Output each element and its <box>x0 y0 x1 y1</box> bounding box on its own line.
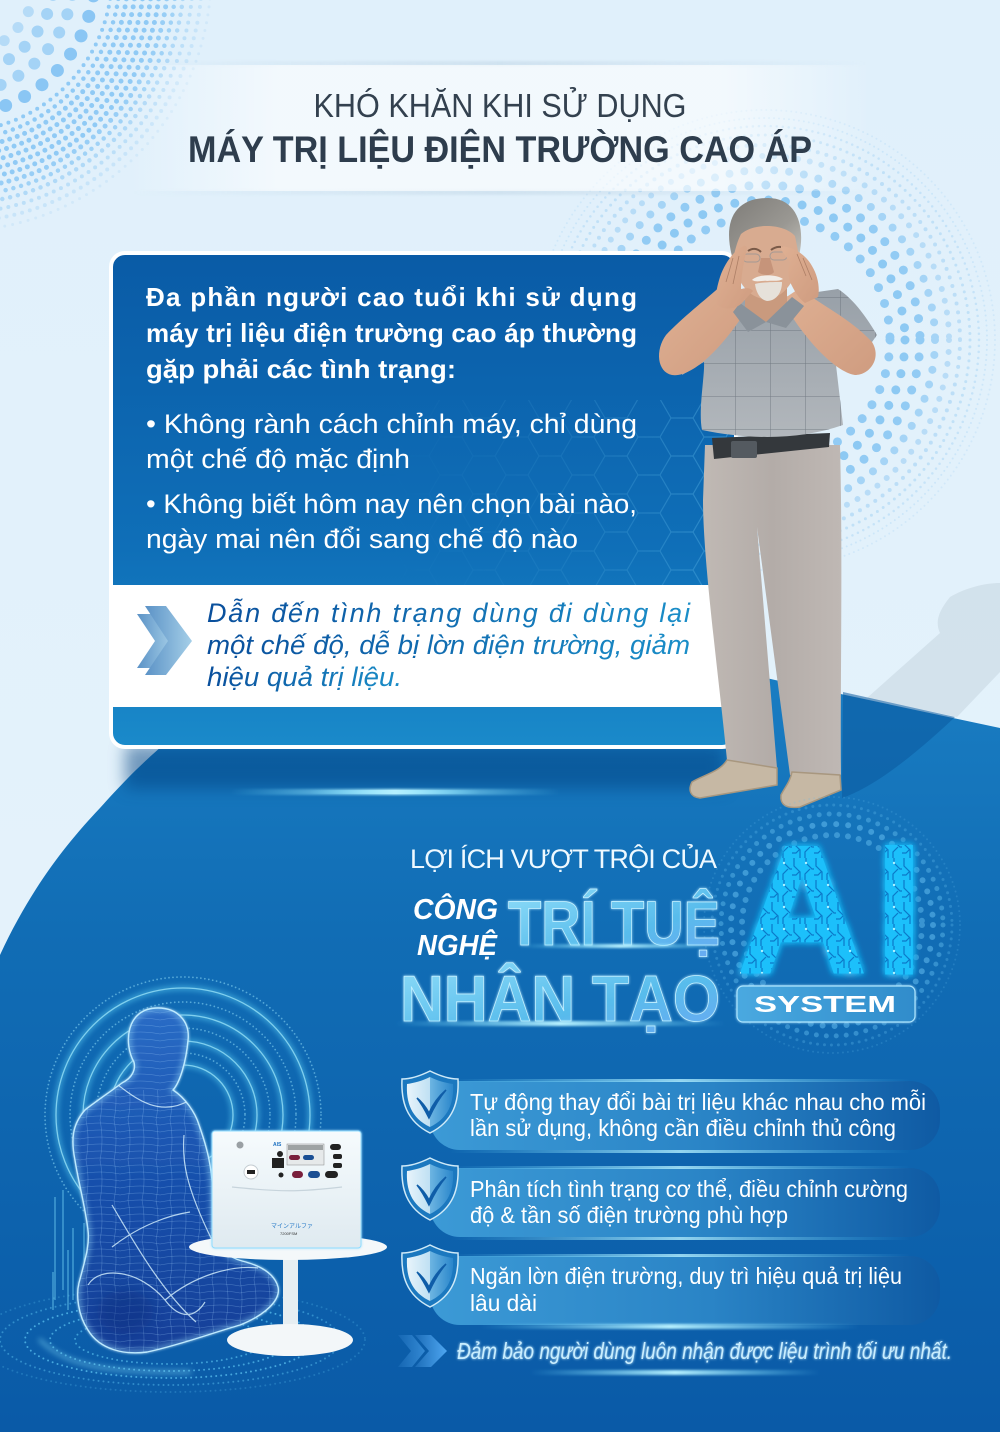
decorative dot arcs: top left <box>0 0 211 231</box>
table with white base <box>189 1234 387 1356</box>
benefit 2: Phân tích tình trạng cơ thể, điều chỉnh cường <box>470 1176 908 1202</box>
concentric energy rings <box>45 977 321 1253</box>
icon: shield check <box>402 1071 458 1133</box>
card intro text <box>146 282 637 384</box>
chevrons icon <box>137 606 192 675</box>
benefit 3 <box>402 1245 940 1325</box>
panel: difficulties card <box>111 253 736 747</box>
heading: benefits: LỢI ÍCH VƯỢT TRỘI CỦA <box>410 842 717 874</box>
vertical light lines <box>53 1190 84 1310</box>
glow line under card <box>230 789 560 795</box>
glow lines below big heading <box>395 944 725 1026</box>
heading: artificial intelligence <box>400 888 720 1035</box>
heading: technology: NGHỆ <box>417 928 499 962</box>
card bullet list: ngày mai nên đổi sang chế độ nào <box>146 524 578 554</box>
consequence text <box>207 598 691 692</box>
card intro text: Đa phần người cao tuổi khi sử dụng <box>146 282 637 312</box>
card bullet list: một chế độ mặc định <box>146 444 410 474</box>
dotted floor <box>0 1288 365 1392</box>
card intro text: máy trị liệu điện trường cao áp thường <box>146 318 637 348</box>
heading: artificial intelligence: TRÍ TUỆ <box>508 888 720 959</box>
benefit 3: Ngăn lờn điện trường, duy trì hiệu quả trị liệu <box>470 1263 902 1289</box>
neck and collar <box>733 285 804 332</box>
benefit 2 <box>402 1158 940 1240</box>
decorative dot arcs: around the man <box>535 110 995 570</box>
title: KHÓ KHĂN KHI SỬ DỤNG <box>314 87 686 124</box>
mind alpha machine: AIS <box>273 1142 282 1148</box>
heading: artificial intelligence: NHÂN TẠO <box>400 962 720 1035</box>
dotted arcs around AI title <box>704 797 960 1053</box>
trousers <box>703 445 841 775</box>
white consequence band <box>112 585 734 707</box>
hands <box>716 246 819 309</box>
icon: shield check <box>402 1158 458 1220</box>
benefit 2: độ & tần số điện trường phù hợp <box>470 1202 788 1228</box>
icon: shield check <box>402 1245 458 1307</box>
title band <box>130 61 870 195</box>
AI logo: A <box>739 810 865 1009</box>
card bullet list: • Không biết hôm nay nên chọn bài nào, <box>146 489 637 519</box>
heading: technology: CÔNG <box>413 892 498 926</box>
mind alpha machine: マインアルファ <box>271 1223 313 1230</box>
blue lower background wave <box>0 657 1000 1432</box>
card intro text: gặp phải các tình trạng: <box>146 354 456 384</box>
benefit 1: Tự động thay đổi bài trị liệu khác nhau cho mỗi <box>470 1089 926 1115</box>
man's cast shadow on wall <box>867 583 1000 717</box>
heading: technology <box>413 892 499 962</box>
belt <box>712 433 830 459</box>
card bullet list <box>146 409 637 554</box>
consequence text: hiệu quả trị liệu. <box>207 662 402 692</box>
glow lines around conclusion <box>480 1324 860 1375</box>
consequence text: một chế độ, dễ bị lờn điện trường, giảm <box>207 629 690 660</box>
title: MÁY TRỊ LIỆU ĐIỆN TRƯỜNG CAO ÁP <box>188 128 812 170</box>
title <box>188 87 812 170</box>
seated wireframe human figure <box>70 1000 285 1360</box>
AI logo: I <box>878 810 920 1009</box>
head and hair <box>729 198 801 301</box>
card drop shadow <box>125 745 725 789</box>
mind alpha machine: 7200FSM <box>280 1231 297 1236</box>
hexagon pattern <box>524 400 728 585</box>
benefit 1 <box>402 1071 940 1153</box>
SYSTEM badge <box>737 986 915 1022</box>
shirt <box>682 289 877 437</box>
arms <box>659 285 876 375</box>
icon: chevrons <box>398 1335 447 1367</box>
older man holding head <box>659 198 877 807</box>
card bullet list: • Không rành cách chỉnh máy, chỉ dùng <box>146 409 637 439</box>
man's cast shadow on floor <box>842 692 955 798</box>
benefit 3: lâu dài <box>470 1290 537 1316</box>
mind alpha machine <box>212 1131 361 1248</box>
finger creases <box>726 254 812 284</box>
benefit 1: lần sử dụng, không cần điều chỉnh thủ công <box>470 1115 896 1141</box>
shoes <box>690 760 841 807</box>
consequence text: Dẫn đến tình trạng dùng đi dùng lại <box>207 598 691 628</box>
SYSTEM badge: SYSTEM <box>754 991 896 1017</box>
